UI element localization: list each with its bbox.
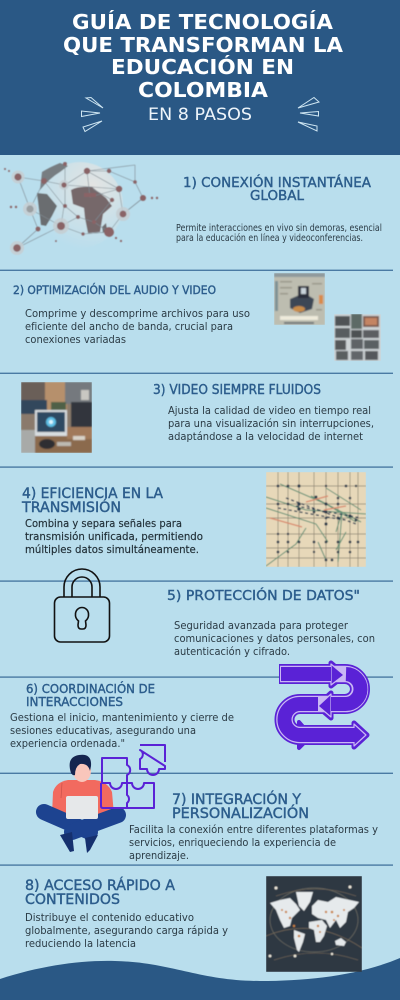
panel: step 7 [44, 745, 378, 862]
heading: 3) VIDEO SIEMPRE FLUIDOS [153, 383, 321, 398]
description: conexiones variadas [25, 335, 126, 346]
description: reduciendo la latencia [25, 939, 136, 950]
header banner [0, 0, 400, 155]
description: Seguridad avanzada para proteger [174, 621, 349, 632]
footer wave [0, 958, 400, 1000]
description: para la educación en línea y videoconferencias. [176, 232, 363, 244]
heading: 2) OPTIMIZACIÓN DEL AUDIO Y VIDEO [13, 282, 216, 297]
icon: padlock [54, 569, 110, 642]
heading [25, 877, 175, 908]
heading: PERSONALIZACIÓN [172, 804, 309, 822]
description: sesiones educativas, asegurando una [10, 726, 196, 737]
description: autenticación y cifrado. [174, 646, 290, 658]
description [129, 824, 378, 862]
description [25, 913, 228, 950]
image: signal grid chart [266, 472, 366, 567]
description: adaptándose a la velocidad de internet [168, 431, 363, 443]
heading: 8) ACCESO RÁPIDO A [25, 877, 175, 894]
icon: person with laptop [44, 755, 118, 853]
heading: TRANSMISIÓN [21, 498, 121, 516]
title: GUÍA DE TECNOLOGÍA [72, 9, 333, 34]
description [176, 223, 382, 244]
heading: 5) PROTECCIÓN DE DATOS" [167, 586, 360, 604]
heading: 4) EFICIENCIA EN LA [22, 486, 163, 502]
description [10, 713, 234, 750]
icon: winding arrows [279, 663, 367, 748]
image: world map [266, 876, 362, 972]
panel: step 4 [21, 472, 366, 567]
description: Distribuye el contenido educativo [25, 913, 194, 924]
description: Ajusta la calidad de video en tiempo real [168, 406, 371, 417]
title: EDUCACIÓN EN [111, 54, 294, 79]
description: transmisión unificada, permitiendo [25, 531, 203, 543]
panel: step 3 [21, 382, 374, 453]
description: Facilita la conexión entre diferentes plataformas y [129, 824, 378, 836]
heading [26, 681, 155, 709]
description: Combina y separa señales para [25, 519, 182, 530]
heading: CONTENIDOS [25, 892, 120, 908]
description: globalmente, asegurando carga rápida y [25, 925, 228, 937]
title [63, 9, 343, 102]
icon: left sparks [82, 98, 103, 132]
description [168, 406, 374, 443]
heading: INTERACCIONES [26, 695, 123, 709]
icon: network globe [4, 162, 158, 255]
description: para una visualización sin interrupciones, [168, 418, 374, 430]
description: eficiente del ancho de banda, crucial para [25, 322, 233, 333]
description: comunicaciones y datos personales, con [174, 634, 375, 645]
heading [183, 173, 372, 204]
heading [172, 790, 309, 822]
description [25, 309, 250, 346]
description: múltiples datos simultáneamente. [25, 544, 199, 556]
description: Comprime y descomprime archivos para uso [25, 309, 250, 320]
icon: right sparks [298, 98, 319, 131]
description: aprendizaje. [129, 851, 189, 862]
panel: step 5 [54, 569, 375, 658]
description [25, 519, 203, 556]
description: servicios, enriqueciendo la experiencia de [129, 838, 336, 849]
icon: puzzle pieces [101, 745, 165, 808]
panel: step 6 [10, 663, 367, 750]
description: experiencia ordenada." [10, 739, 125, 750]
heading: GLOBAL [250, 188, 304, 204]
heading: 1) CONEXIÓN INSTANTÁNEA [183, 173, 372, 191]
panel: step 1 [4, 162, 382, 255]
heading: 7) INTEGRACIÓN Y [172, 790, 301, 808]
image: compression device [274, 273, 325, 325]
title: QUE TRANSFORMAN LA [63, 33, 343, 57]
subtitle: EN 8 PASOS [148, 105, 252, 124]
image: video workstation [21, 382, 92, 453]
title: COLOMBIA [138, 78, 268, 102]
heading [21, 486, 163, 516]
description [174, 621, 375, 658]
image: device collage [334, 314, 381, 361]
description: Gestiona el inicio, mantenimiento y cierre de [10, 713, 234, 724]
panel: step 2 [13, 273, 381, 361]
heading: 6) COORDINACIÓN DE [26, 681, 155, 696]
panel: step 8 [25, 876, 362, 972]
